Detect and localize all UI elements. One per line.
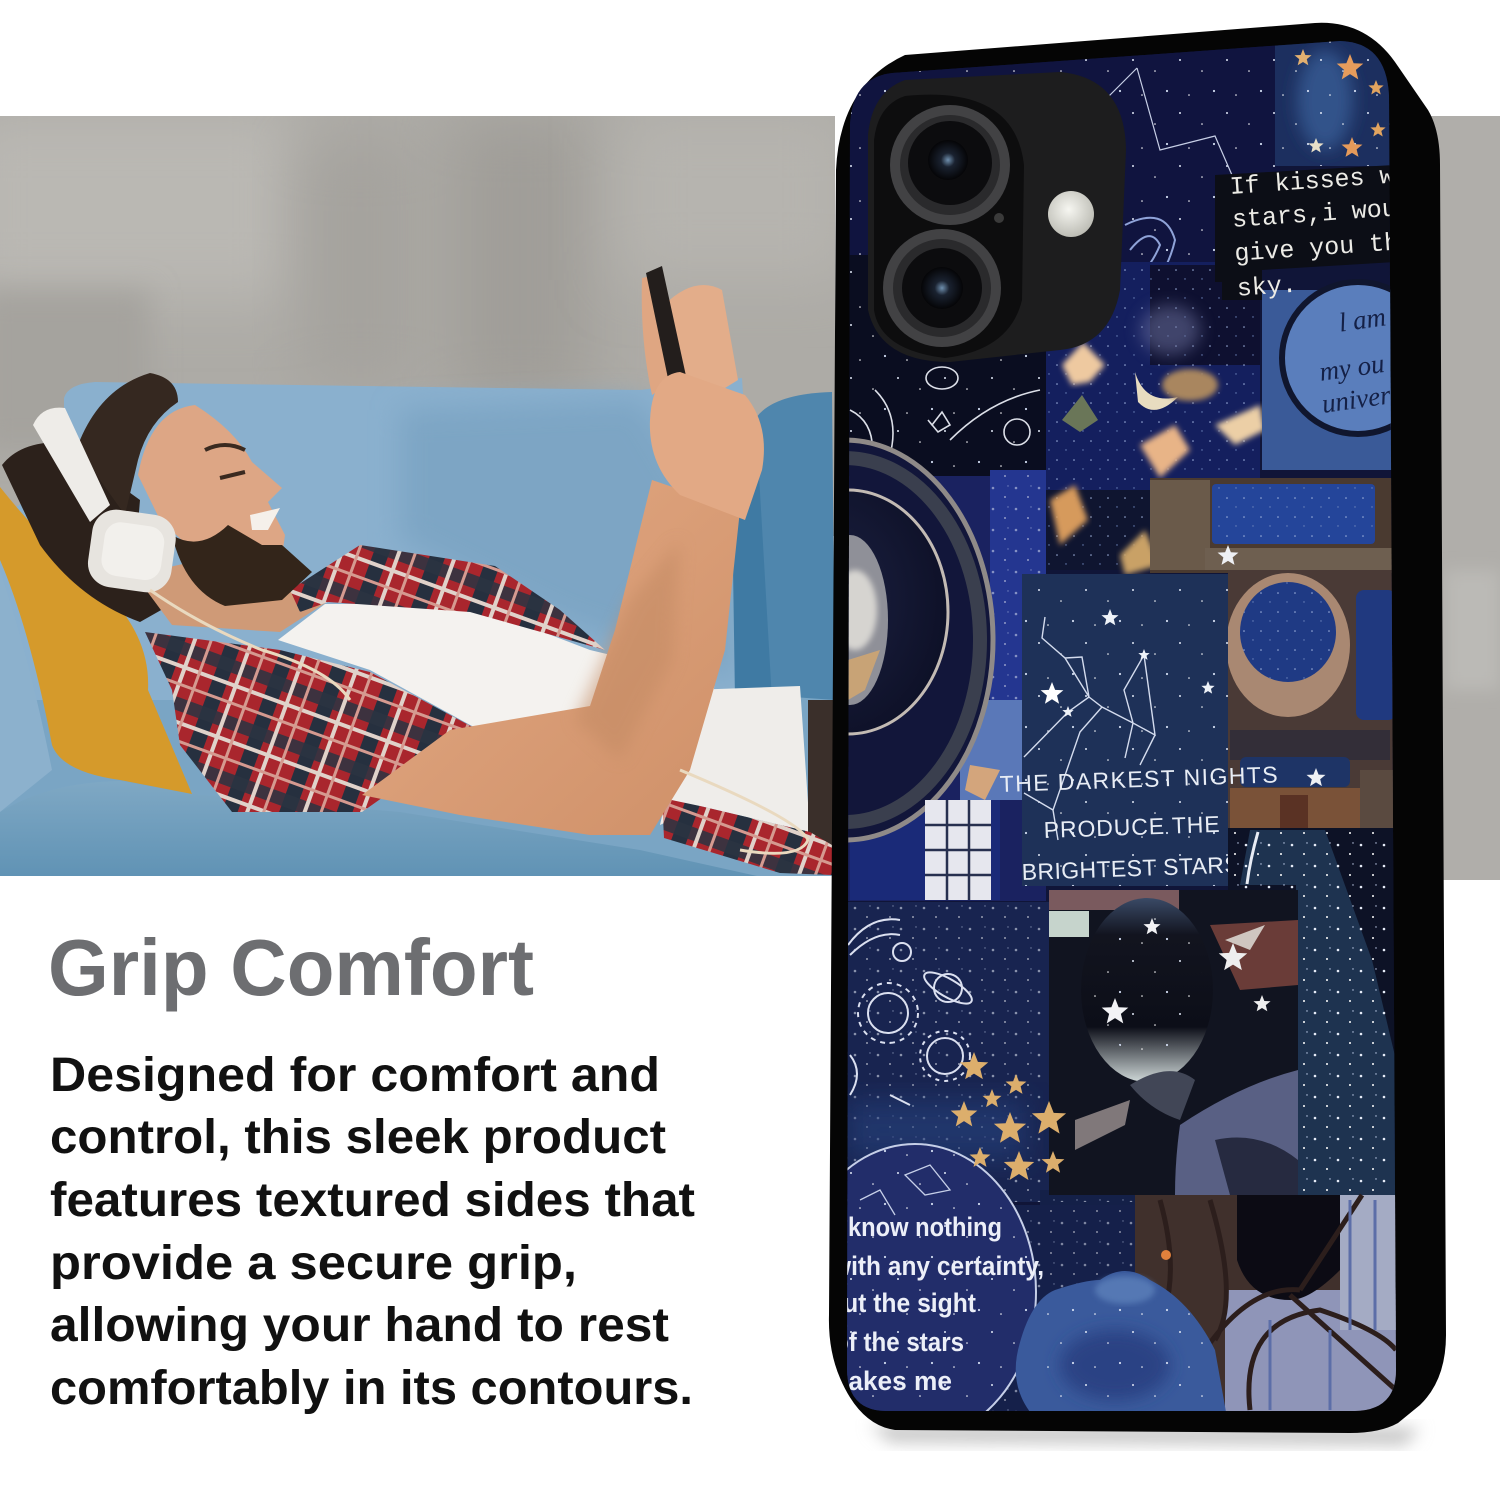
star chart panel xyxy=(794,1144,1140,1440)
plaid sleeve xyxy=(145,632,478,812)
sofa arm right xyxy=(752,392,835,700)
black doodle panel xyxy=(848,255,1046,480)
body text: allowing your hand to rest xyxy=(50,1299,669,1352)
brown window strip xyxy=(1150,478,1395,573)
sofa left cushion xyxy=(0,700,52,812)
eye and brow xyxy=(205,445,245,478)
starry corner panel xyxy=(1275,38,1395,166)
quote block: give you th xyxy=(1233,228,1400,269)
microphone dot xyxy=(994,213,1004,223)
lower lens xyxy=(883,229,1001,347)
heading: Grip Comfort xyxy=(48,923,534,1012)
blue badge panel xyxy=(1262,282,1434,470)
arch blue circle xyxy=(1240,582,1336,682)
wall strip behind phone at right xyxy=(1430,116,1500,880)
constellation quote panel: PRODUCE THE xyxy=(1043,811,1220,843)
star chart panel: but the sight xyxy=(828,1288,976,1318)
flash xyxy=(1048,191,1094,237)
gold stars cluster xyxy=(951,1052,1066,1180)
body text: Designed for comfort and xyxy=(50,1049,660,1102)
sofa arm inner shadow xyxy=(733,479,772,688)
neck xyxy=(148,564,326,632)
constellation quote panel xyxy=(999,574,1278,886)
shirt hem and white fabric at hip xyxy=(660,686,810,832)
face xyxy=(138,405,285,546)
collage printed on case xyxy=(847,41,1396,1411)
body text xyxy=(50,1049,695,1415)
case drop shadow xyxy=(870,1425,1420,1445)
gold bokeh panel xyxy=(1045,262,1265,575)
yellow pillow xyxy=(0,487,192,794)
quote block: sky. xyxy=(1236,271,1298,304)
chart circle xyxy=(794,1144,1036,1440)
crystal ball panel xyxy=(1049,890,1298,1195)
jeans xyxy=(808,700,833,845)
module body xyxy=(868,72,1126,362)
arm and forearm xyxy=(362,480,740,835)
headphone cable xyxy=(150,590,808,853)
globe highlight xyxy=(812,535,888,705)
headphone band xyxy=(33,408,110,522)
star chart panel: makes me xyxy=(825,1366,952,1396)
glass sphere panel xyxy=(697,440,1046,901)
top constellation panel xyxy=(850,45,1280,262)
brown dome window panel xyxy=(1135,1195,1398,1415)
side blue xyxy=(1356,590,1396,720)
headphone inner cup xyxy=(102,522,164,580)
sofa seat xyxy=(0,822,756,876)
concrete wall xyxy=(0,110,850,536)
doodle sky and nebula panel xyxy=(846,902,1140,1290)
quote block xyxy=(1215,162,1403,304)
fist xyxy=(650,372,764,520)
constellation quote panel: BRIGHTEST STARS xyxy=(1021,851,1240,885)
plaid collar xyxy=(290,545,605,650)
building xyxy=(960,700,1030,800)
window xyxy=(925,800,991,900)
arches panel xyxy=(1226,570,1398,830)
back finger xyxy=(642,277,668,395)
blue bar xyxy=(1240,757,1350,787)
crystal ball xyxy=(1081,898,1213,1082)
collage base xyxy=(848,41,1394,1205)
sofa back cushion xyxy=(0,378,762,700)
inner ring xyxy=(748,490,948,734)
star chart panel: of the stars xyxy=(834,1327,964,1357)
constellation quote panel: THE DARKEST NIGHTS xyxy=(999,761,1278,797)
photo: man relaxing on sofa using phone xyxy=(0,110,850,880)
badge circle xyxy=(1282,282,1434,434)
watercolor blob xyxy=(1016,1271,1226,1412)
forearm shading xyxy=(570,562,674,745)
body text: control, this sleek product xyxy=(50,1111,666,1164)
arch ring xyxy=(1226,573,1350,717)
body text: features textured sides that xyxy=(50,1174,695,1227)
phone in hand xyxy=(646,266,686,376)
case back shell xyxy=(829,23,1446,1433)
front fingers xyxy=(664,285,738,388)
camera module xyxy=(868,72,1126,362)
blue badge panel: my ou xyxy=(1317,348,1386,387)
lens housing xyxy=(874,95,1024,358)
quote block: stars,i wou xyxy=(1231,194,1398,235)
star chart panel: with any certainty, xyxy=(831,1251,1044,1281)
sofa base fill xyxy=(0,698,833,876)
upper lens xyxy=(890,105,1010,225)
blue badge panel: univers xyxy=(1320,378,1403,419)
speckled fabric panel xyxy=(1228,828,1398,1200)
plaid hem xyxy=(662,798,832,875)
hair top xyxy=(78,373,178,515)
quote block: If kisses w xyxy=(1229,162,1395,202)
outer ring xyxy=(697,440,993,840)
phone case xyxy=(828,22,1446,1451)
hands and sleeve xyxy=(1175,1070,1298,1195)
body text: provide a secure grip, xyxy=(50,1237,577,1290)
hair back xyxy=(2,442,170,622)
mouth xyxy=(250,508,280,530)
star chart panel: know nothing xyxy=(848,1212,1002,1242)
blue badge panel: l am xyxy=(1337,301,1388,338)
body text: comfortably in its contours. xyxy=(50,1362,693,1415)
sofa back shading xyxy=(400,400,735,680)
beard xyxy=(172,525,312,606)
white shirt xyxy=(278,604,714,726)
headphone ear cup xyxy=(88,510,176,592)
